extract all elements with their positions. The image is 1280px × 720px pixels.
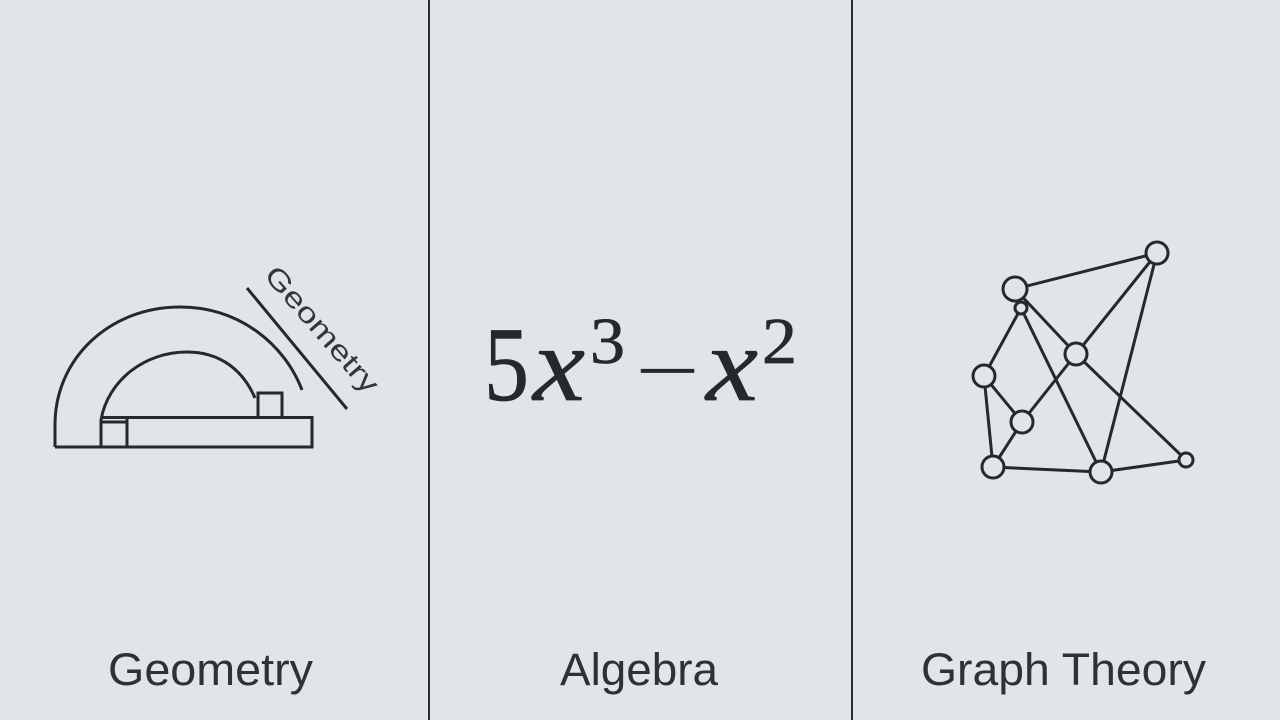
graph edges xyxy=(984,253,1186,472)
graph nodes xyxy=(973,242,1193,483)
diagram label: Geometry: Geometry xyxy=(258,260,386,399)
formula: 5x cubed minus x squared: x xyxy=(531,306,585,423)
heading: Algebra: Algebra xyxy=(560,644,719,695)
network diagram xyxy=(973,242,1193,483)
formula: 5x cubed minus x squared xyxy=(484,305,797,423)
heading: Geometry: Geometry xyxy=(108,644,314,695)
panel: graph theory xyxy=(921,242,1207,695)
formula: 5x cubed minus x squared: 5 xyxy=(484,306,529,423)
formula: 5x cubed minus x squared: 3 xyxy=(590,305,625,378)
icon: protractor diagram xyxy=(55,288,347,447)
panel: algebra xyxy=(484,305,797,695)
formula: 5x cubed minus x squared: x xyxy=(704,306,758,423)
panel: geometry xyxy=(55,260,386,695)
heading: Graph Theory: Graph Theory xyxy=(921,644,1207,695)
formula: 5x cubed minus x squared: 2 xyxy=(762,305,797,378)
formula: 5x cubed minus x squared: – xyxy=(640,328,695,401)
